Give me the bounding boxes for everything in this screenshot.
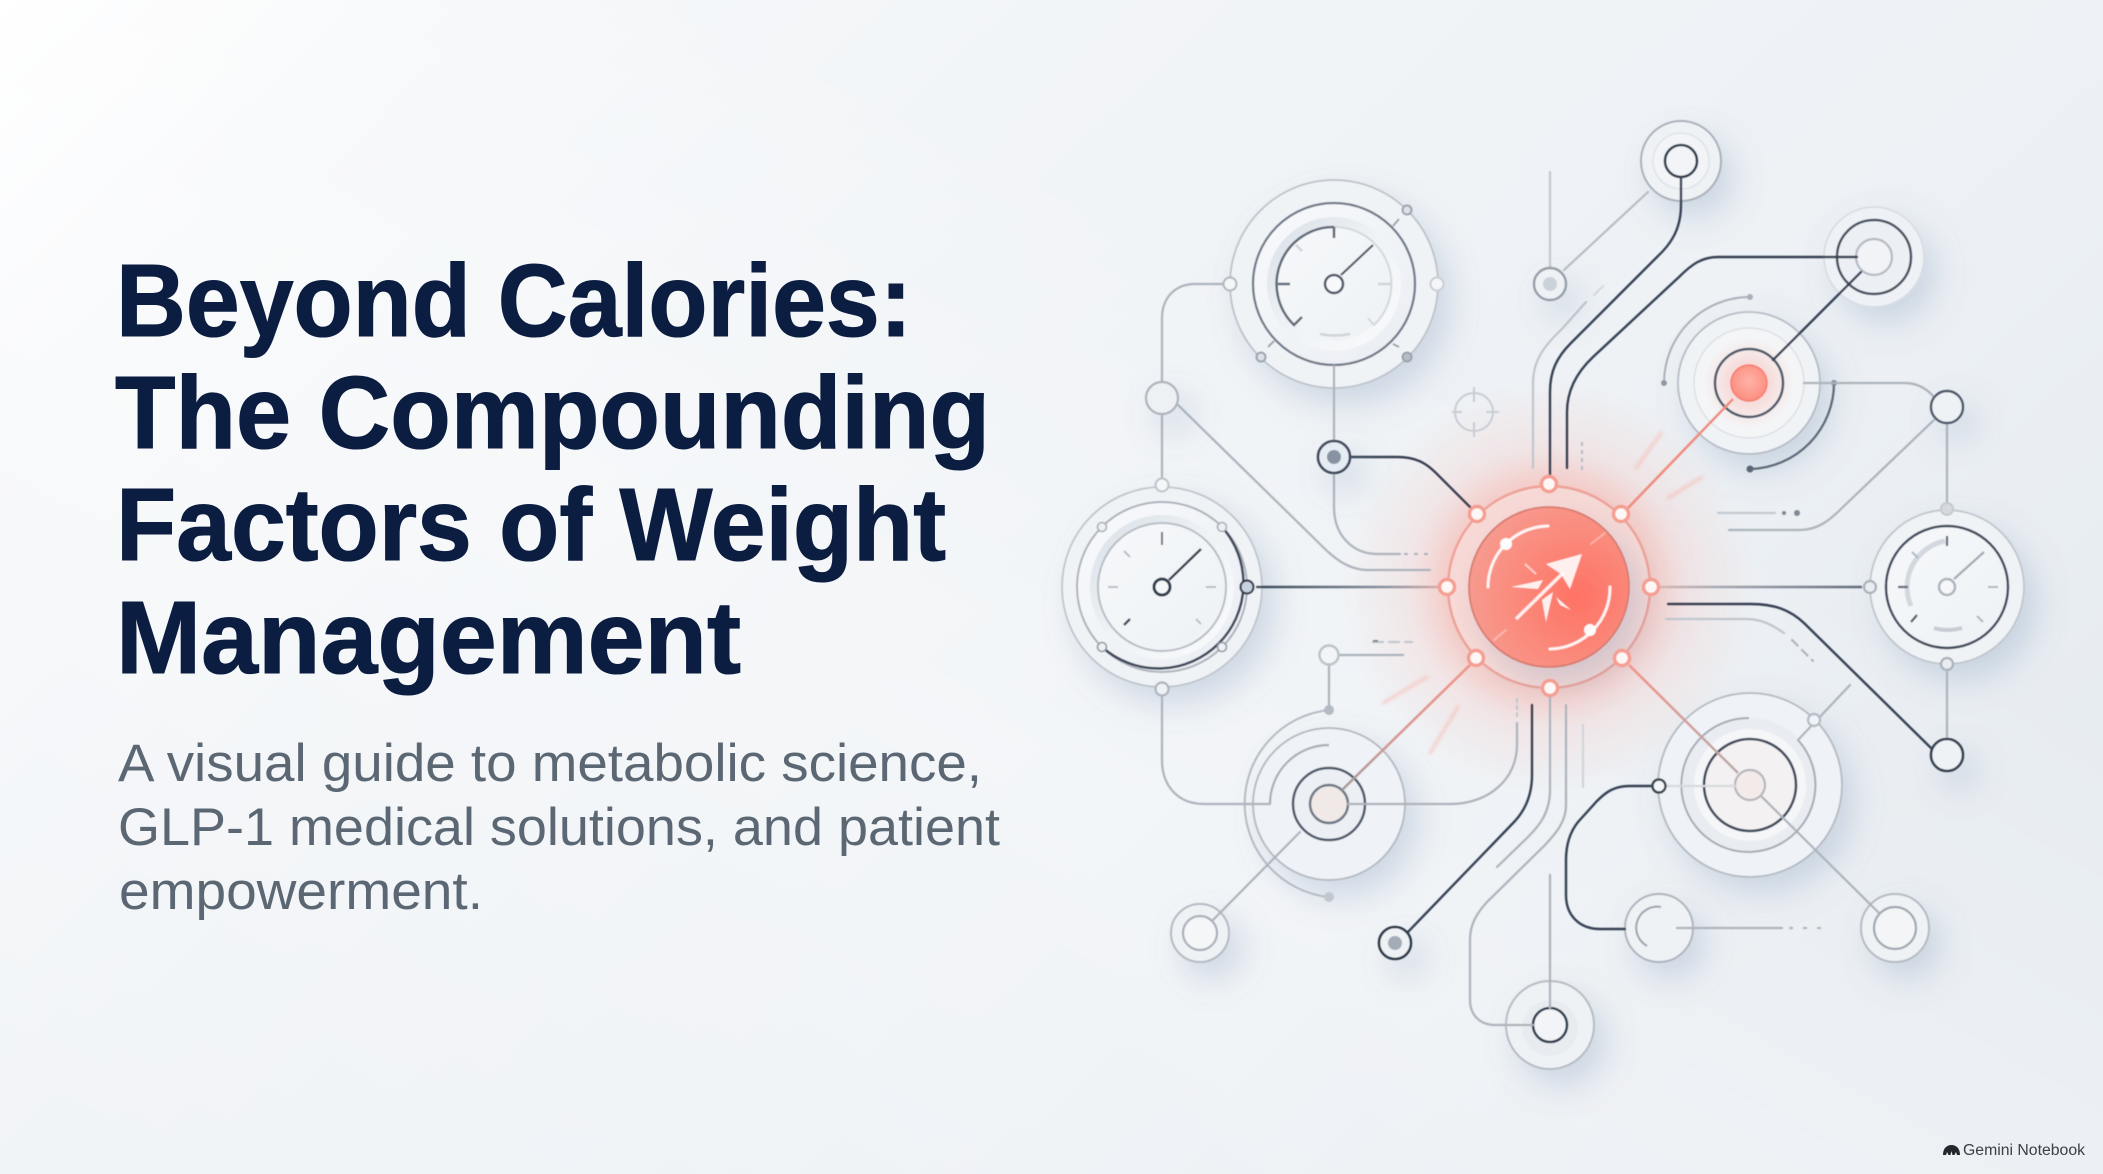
network diagram bbox=[1062, 121, 2024, 1069]
subtitle: A visual guide to metabolic science, bbox=[118, 734, 982, 793]
gauge: top bbox=[1230, 180, 1438, 388]
title: The Compounding bbox=[115, 355, 990, 470]
node: bottom centre bbox=[1506, 981, 1594, 1069]
motion streaks bbox=[1383, 433, 1702, 753]
hub bbox=[1448, 486, 1650, 688]
title: Beyond Calories: bbox=[116, 243, 912, 358]
gauge: left bbox=[1062, 487, 1262, 687]
watermark label: Gemini Notebook bbox=[1963, 1142, 2085, 1159]
hub arcs bbox=[1488, 526, 1610, 649]
small terminal nodes bbox=[1146, 268, 1963, 959]
hub arrow icon bbox=[1511, 554, 1582, 622]
node: red target bbox=[1661, 294, 1837, 472]
connectors: red lines from hub bbox=[1342, 399, 1738, 790]
hub ring nodes bbox=[1440, 476, 1658, 696]
hub glow bbox=[1344, 382, 1754, 792]
subtitle: GLP-1 medical solutions, and patient bbox=[118, 798, 1000, 857]
node: top right bbox=[1824, 207, 1924, 307]
connectors: horizontal links to hub bbox=[1256, 586, 1862, 588]
title: Factors of Weight bbox=[116, 467, 946, 582]
title bbox=[115, 243, 990, 695]
small dashes and dots bbox=[1373, 510, 1800, 642]
node: lower arc bbox=[1625, 894, 1693, 962]
node: lower far right bbox=[1861, 894, 1929, 962]
node: top centre bbox=[1641, 121, 1721, 201]
title: Management bbox=[116, 580, 741, 695]
gauge: right bbox=[1870, 510, 2024, 664]
subtitle: empowerment. bbox=[119, 862, 483, 921]
node: lower left target bbox=[1245, 705, 1405, 902]
crosshair icon bbox=[1452, 387, 1499, 437]
node: lower right target bbox=[1658, 693, 1842, 877]
subtitle bbox=[118, 734, 1000, 921]
node: lower far left bbox=[1171, 904, 1229, 962]
connectors: grey lines bbox=[1162, 172, 1947, 1025]
watermark icon bbox=[1943, 1145, 1960, 1155]
connectors: dark lines bbox=[1350, 177, 1931, 933]
watermark bbox=[1943, 1142, 2085, 1159]
